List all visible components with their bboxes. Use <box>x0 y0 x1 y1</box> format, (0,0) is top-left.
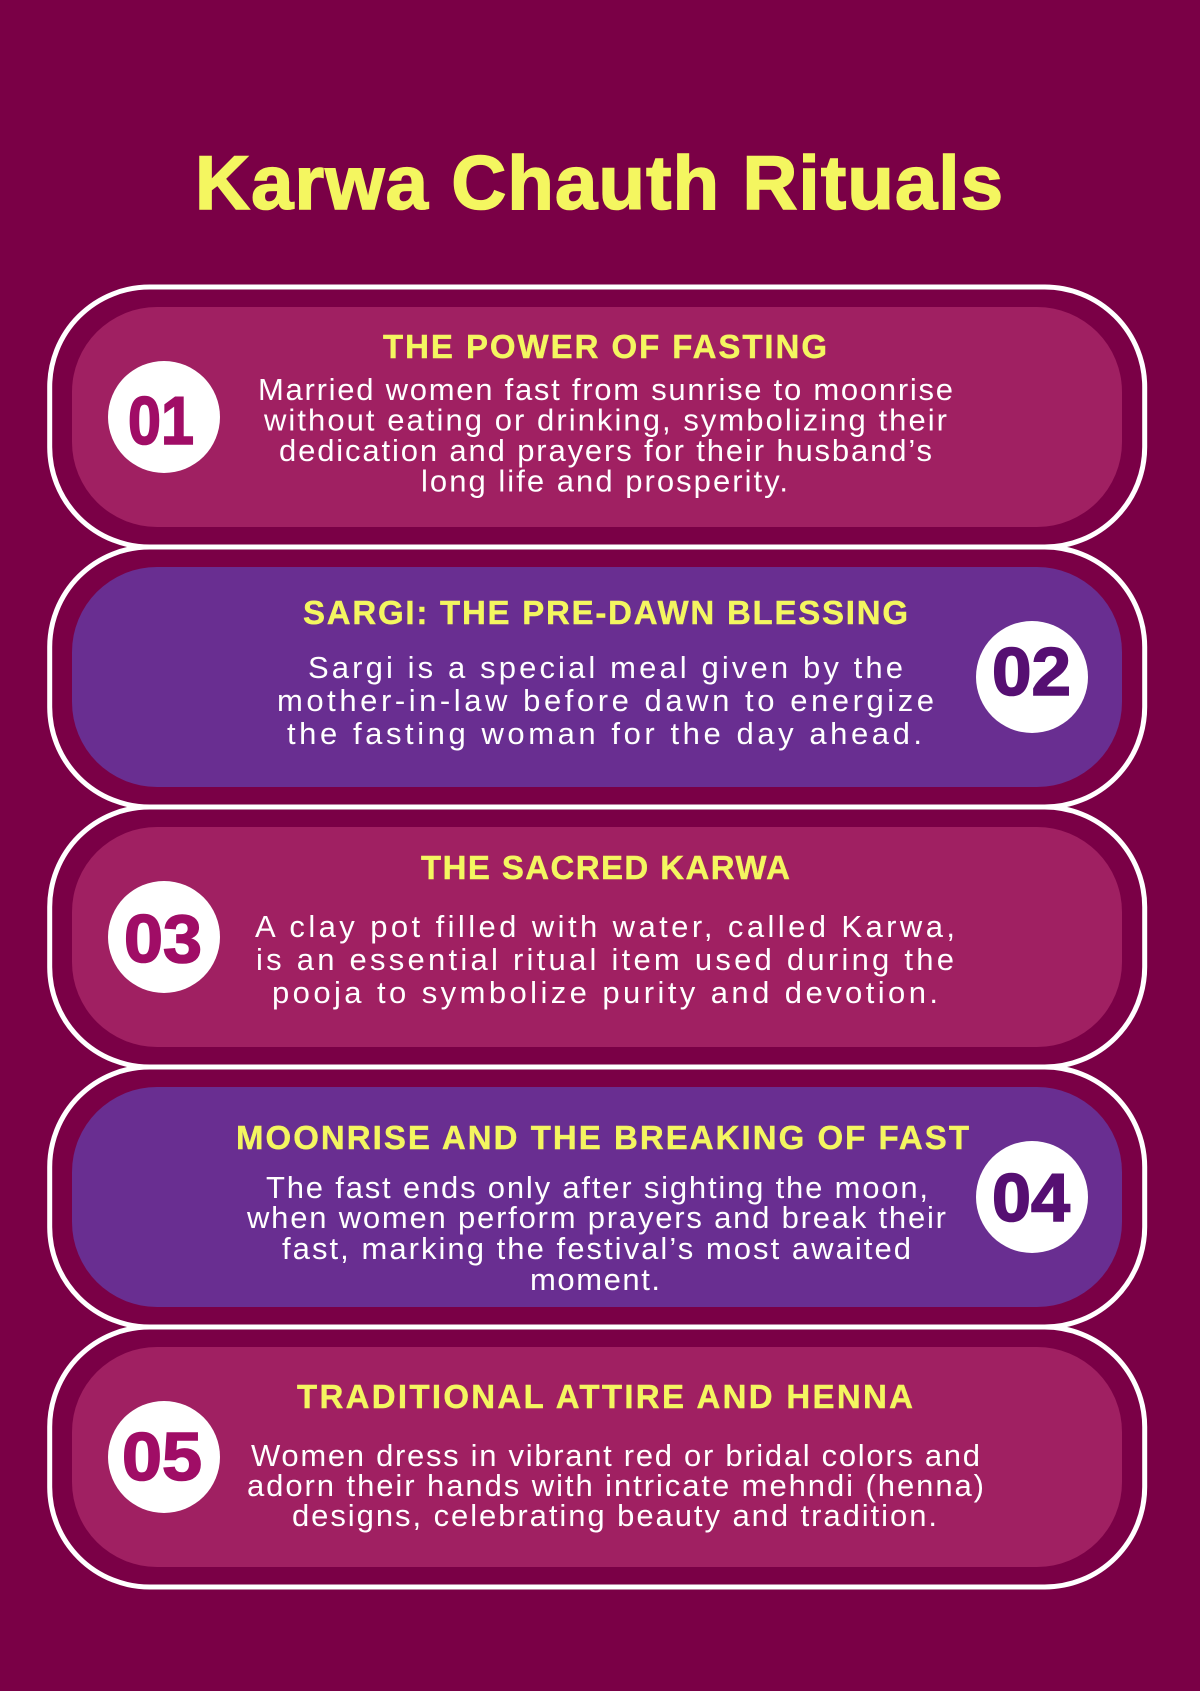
number badge 04: 04 <box>992 1160 1070 1236</box>
body text: pooja to symbolize purity and devotion. <box>272 975 938 1010</box>
heading: MOONRISE AND THE BREAKING OF FAST <box>236 1119 969 1156</box>
panel fill <box>72 827 1122 1047</box>
body text: The fast ends only after sighting the moon, <box>266 1170 928 1205</box>
body text: the fasting woman for the day ahead. <box>287 716 922 751</box>
panel: moonrise <box>50 1067 1145 1327</box>
heading: THE POWER OF FASTING <box>383 328 827 365</box>
body text <box>258 372 953 498</box>
panel outline <box>50 287 1145 547</box>
heading: TRADITIONAL ATTIRE AND HENNA <box>297 1378 913 1415</box>
panel: traditional attire and henna <box>50 1327 1145 1587</box>
panel: sargi <box>50 547 1145 807</box>
body text <box>247 1438 984 1533</box>
panel: the sacred karwa <box>50 807 1145 1067</box>
panel fill <box>72 567 1122 787</box>
body text: without eating or drinking, symbolizing their <box>263 402 947 438</box>
body text: is an essential ritual item used during the <box>256 942 954 977</box>
number badge 03: 03 <box>124 901 202 977</box>
panel outline <box>50 1067 1145 1327</box>
title: Karwa Chauth Rituals <box>195 141 1003 226</box>
body text: adorn their hands with intricate mehndi (henna) <box>247 1468 984 1503</box>
panel: the power of fasting <box>50 287 1145 547</box>
body text <box>255 909 955 1010</box>
panel outline <box>50 1327 1145 1587</box>
heading: THE SACRED KARWA <box>421 849 790 886</box>
panel outline <box>50 547 1145 807</box>
body text <box>246 1170 946 1297</box>
body text: dedication and prayers for their husband’s <box>279 433 932 468</box>
number badge 04 <box>976 1141 1088 1253</box>
body text: Sargi is a special meal given by the <box>308 650 903 685</box>
heading: SARGI: THE PRE-DAWN BLESSING <box>303 594 908 631</box>
number badge 01 <box>108 361 220 473</box>
number badge 01: 01 <box>128 383 194 459</box>
panel fill <box>72 1087 1122 1307</box>
body text: designs, celebrating beauty and tradition. <box>292 1498 937 1533</box>
number badge 02: 02 <box>992 634 1071 710</box>
body text: A clay pot filled with water, called Karwa, <box>255 909 955 944</box>
panel fill <box>72 1347 1122 1567</box>
body text: moment. <box>530 1262 660 1297</box>
number badge 02 <box>976 621 1088 733</box>
body text: Women dress in vibrant red or bridal colors and <box>251 1438 980 1473</box>
body text: mother-in-law before dawn to energize <box>277 683 934 718</box>
number badge 05 <box>108 1401 220 1513</box>
panel outline <box>50 807 1145 1067</box>
number badge 05: 05 <box>122 1419 202 1495</box>
number badge 03 <box>108 881 220 993</box>
body text: Married women fast from sunrise to moonrise <box>258 372 953 407</box>
body text: when women perform prayers and break their <box>246 1200 946 1235</box>
body text: fast, marking the festival’s most awaited <box>282 1231 911 1266</box>
panel fill <box>72 307 1122 527</box>
body text: long life and prosperity. <box>421 464 788 498</box>
body text <box>277 650 934 751</box>
